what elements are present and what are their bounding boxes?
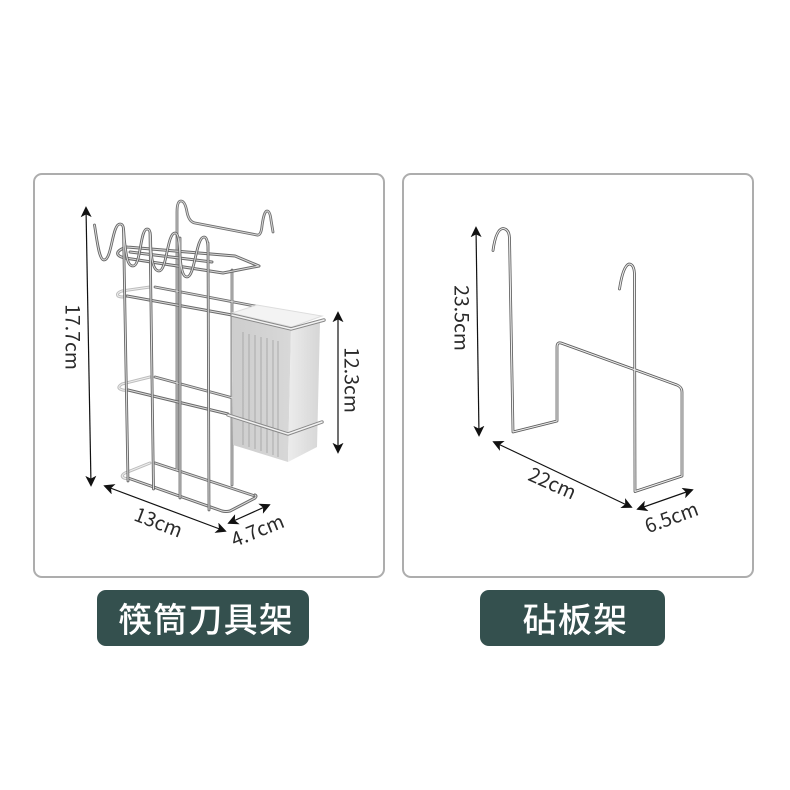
dimension label: 4.7cm: 4.7cm: [226, 505, 288, 553]
rack rails, light side bars: [118, 287, 150, 478]
label: chopstick and knife rack: 筷筒刀具架: [118, 593, 294, 642]
dimension arrow: 13cm: [105, 486, 225, 531]
label: cutting board rack: 砧板架: [523, 593, 628, 642]
dimension label: 12.3cm: 12.3cm: [338, 347, 368, 413]
dimension label: 23.5cm: 23.5cm: [448, 285, 478, 351]
panel: knife and chopstick rack: [33, 173, 385, 578]
box ribs: [243, 332, 278, 457]
dimension arrow: 6.5cm: [638, 490, 692, 509]
dimension label: 13cm: 13cm: [131, 499, 187, 543]
box front: [232, 315, 291, 462]
label: cutting board rack: [480, 590, 665, 646]
box clips: [228, 315, 324, 434]
dimension arrow: 23.5cm: [476, 228, 479, 435]
illustration: knife rack wireframe: [94, 201, 273, 512]
box side: [288, 322, 320, 462]
dimension arrow: 17.7cm: [86, 208, 91, 485]
illustration: cutting board rack wireframe: [493, 228, 682, 492]
box lid: [232, 305, 322, 327]
illustration: chopstick holder box: [228, 305, 324, 462]
panel: cutting board rack: [402, 173, 754, 578]
dimension arrow: 22cm: [494, 442, 631, 507]
dimension arrow: 12.3cm: [337, 313, 339, 452]
dimension label: 22cm: 22cm: [524, 459, 582, 505]
dimension label: 17.7cm: 17.7cm: [60, 304, 88, 370]
dimension label: 6.5cm: 6.5cm: [640, 493, 702, 539]
dimension arrow: 4.7cm: [229, 505, 269, 523]
